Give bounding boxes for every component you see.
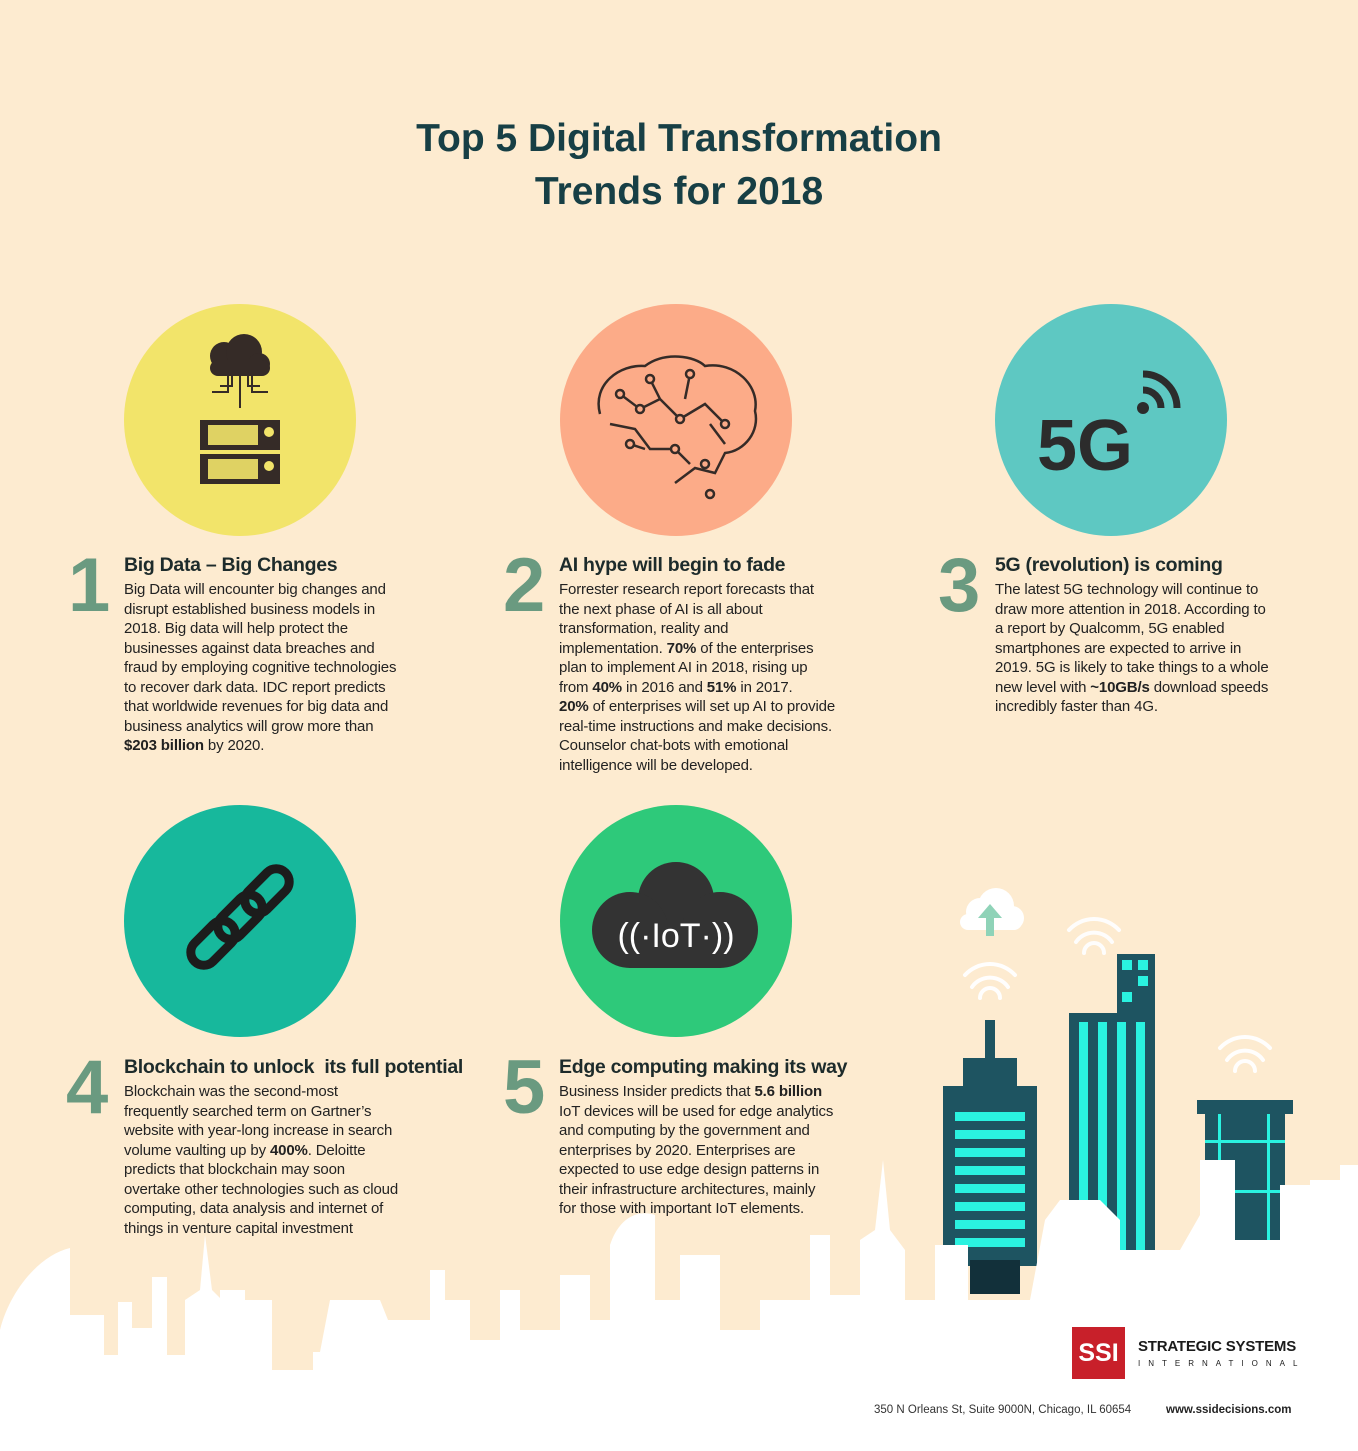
text: AI (559, 554, 835, 774)
icon circle: AI brain (560, 304, 792, 536)
text: edge: Business Insider predicts that 5.6 billion (559, 1083, 822, 1100)
text: AI: intelligence will be developed. (559, 756, 753, 774)
text: edge: enterprises by 2020. Enterprises are (559, 1142, 795, 1158)
text: big data: $203 billion by 2020. (124, 737, 264, 754)
skyline silhouette (0, 1160, 1358, 1451)
text: edge: their infrastructure architectures, mainly (559, 1180, 815, 1198)
icon circle: IoT: ((·IoT·)) (617, 917, 735, 955)
text: edge: for those with important IoT elements. (559, 1200, 804, 1217)
text: big data: Big Data will encounter big changes and (124, 581, 386, 598)
text: big data: that worldwide revenues for big data and (124, 698, 388, 715)
icon circle: IoT (560, 805, 792, 1037)
logo text: STRATEGIC SYSTEMS (1138, 1338, 1296, 1355)
footer address: 350 N Orleans St, Suite 9000N, Chicago, IL 60654 (874, 1404, 1131, 1416)
text: big data: to recover dark data. IDC report predicts (124, 678, 385, 696)
icon circle: 5G (995, 304, 1227, 536)
logo text: INTERNATIONAL (1138, 1359, 1305, 1368)
logo: SSI (1072, 1327, 1125, 1379)
title (416, 117, 942, 213)
text: blockchain: predicts that blockchain may soon (124, 1161, 345, 1178)
text: AI: implementation. 70% of the enterprises (559, 640, 813, 656)
text: 5G: 2019. 5G is likely to take things to a whole (995, 659, 1269, 676)
text: big data: Big Data – Big Changes (124, 554, 337, 576)
number 5: 5 (503, 1045, 545, 1130)
text: AI: 20% of enterprises will set up AI to provide (559, 698, 835, 715)
icon circle: big data (124, 304, 356, 536)
text: 5G: The latest 5G technology will continue to (995, 581, 1258, 598)
text: edge: IoT devices will be used for edge analytics (559, 1102, 833, 1120)
text: big data: 2018. Big data will help protect the (124, 620, 348, 637)
text: blockchain: computing, data analysis and internet of (124, 1200, 383, 1217)
text: 5G: a report by Qualcomm, 5G enabled (995, 620, 1224, 637)
text: 5G: 5G (revolution) is coming (995, 554, 1223, 576)
text: big data: business analytics will grow more than (124, 718, 373, 734)
text: 5G (995, 554, 1269, 715)
number 4: 4 (66, 1045, 108, 1130)
number 3: 3 (938, 543, 980, 628)
icon: wifi signals (965, 919, 1270, 1071)
title: Top 5 Digital Transformation (416, 117, 942, 160)
text: big data: fraud by employing cognitive technologies (124, 659, 396, 676)
icon: cloud upload (960, 888, 1024, 936)
text: 5G: incredibly faster than 4G. (995, 698, 1158, 715)
icon circle: 5G: 5G (1037, 406, 1133, 486)
text: blockchain (124, 1056, 463, 1236)
text: AI: Counselor chat-bots with emotional (559, 737, 788, 754)
text: blockchain: Blockchain was the second-most (124, 1083, 338, 1100)
icon circle: blockchain (124, 805, 356, 1037)
text: blockchain: Blockchain to unlock its full potential (124, 1056, 463, 1078)
buildings (943, 954, 1293, 1294)
title: Trends for 2018 (535, 170, 823, 213)
text: edge: and computing by the government and (559, 1122, 810, 1139)
text: edge: expected to use edge design patterns in (559, 1161, 819, 1178)
text: big data: disrupt established business models in (124, 600, 375, 618)
number 2: 2 (503, 543, 545, 628)
text: AI: AI hype will begin to fade (559, 554, 785, 576)
text: big data (124, 554, 396, 754)
logo: SSI: SSI (1078, 1339, 1119, 1367)
footer url: www.ssidecisions.com (1166, 1404, 1291, 1416)
text: AI: real-time instructions and make decisions. (559, 718, 832, 734)
text: blockchain: website with year-long increase in search (124, 1122, 392, 1139)
text: 5G: new level with ~10GB/s download speeds (995, 678, 1268, 696)
text: blockchain: overtake other technologies such as cloud (124, 1180, 398, 1198)
text: AI: plan to implement AI in 2018, rising up (559, 659, 807, 676)
text: blockchain: things in venture capital investment (124, 1220, 353, 1236)
text: AI: Forrester research report forecasts that (559, 581, 814, 598)
number 1: 1 (68, 543, 110, 628)
text: AI: the next phase of AI is all about (559, 600, 763, 618)
text: blockchain: volume vaulting up by 400%. Deloitte (124, 1142, 365, 1158)
text: blockchain: frequently searched term on Gartner’s (124, 1102, 371, 1120)
text: edge: Edge computing making its way (559, 1056, 847, 1078)
logo text (1138, 1338, 1305, 1368)
text: AI: from 40% in 2016 and 51% in 2017. (559, 678, 793, 696)
text: 5G: smartphones are expected to arrive in (995, 640, 1241, 656)
text: AI: transformation, reality and (559, 620, 728, 637)
text: edge (559, 1056, 848, 1217)
text: big data: businesses against data breaches and (124, 640, 375, 656)
text: 5G: draw more attention in 2018. According to (995, 600, 1266, 618)
